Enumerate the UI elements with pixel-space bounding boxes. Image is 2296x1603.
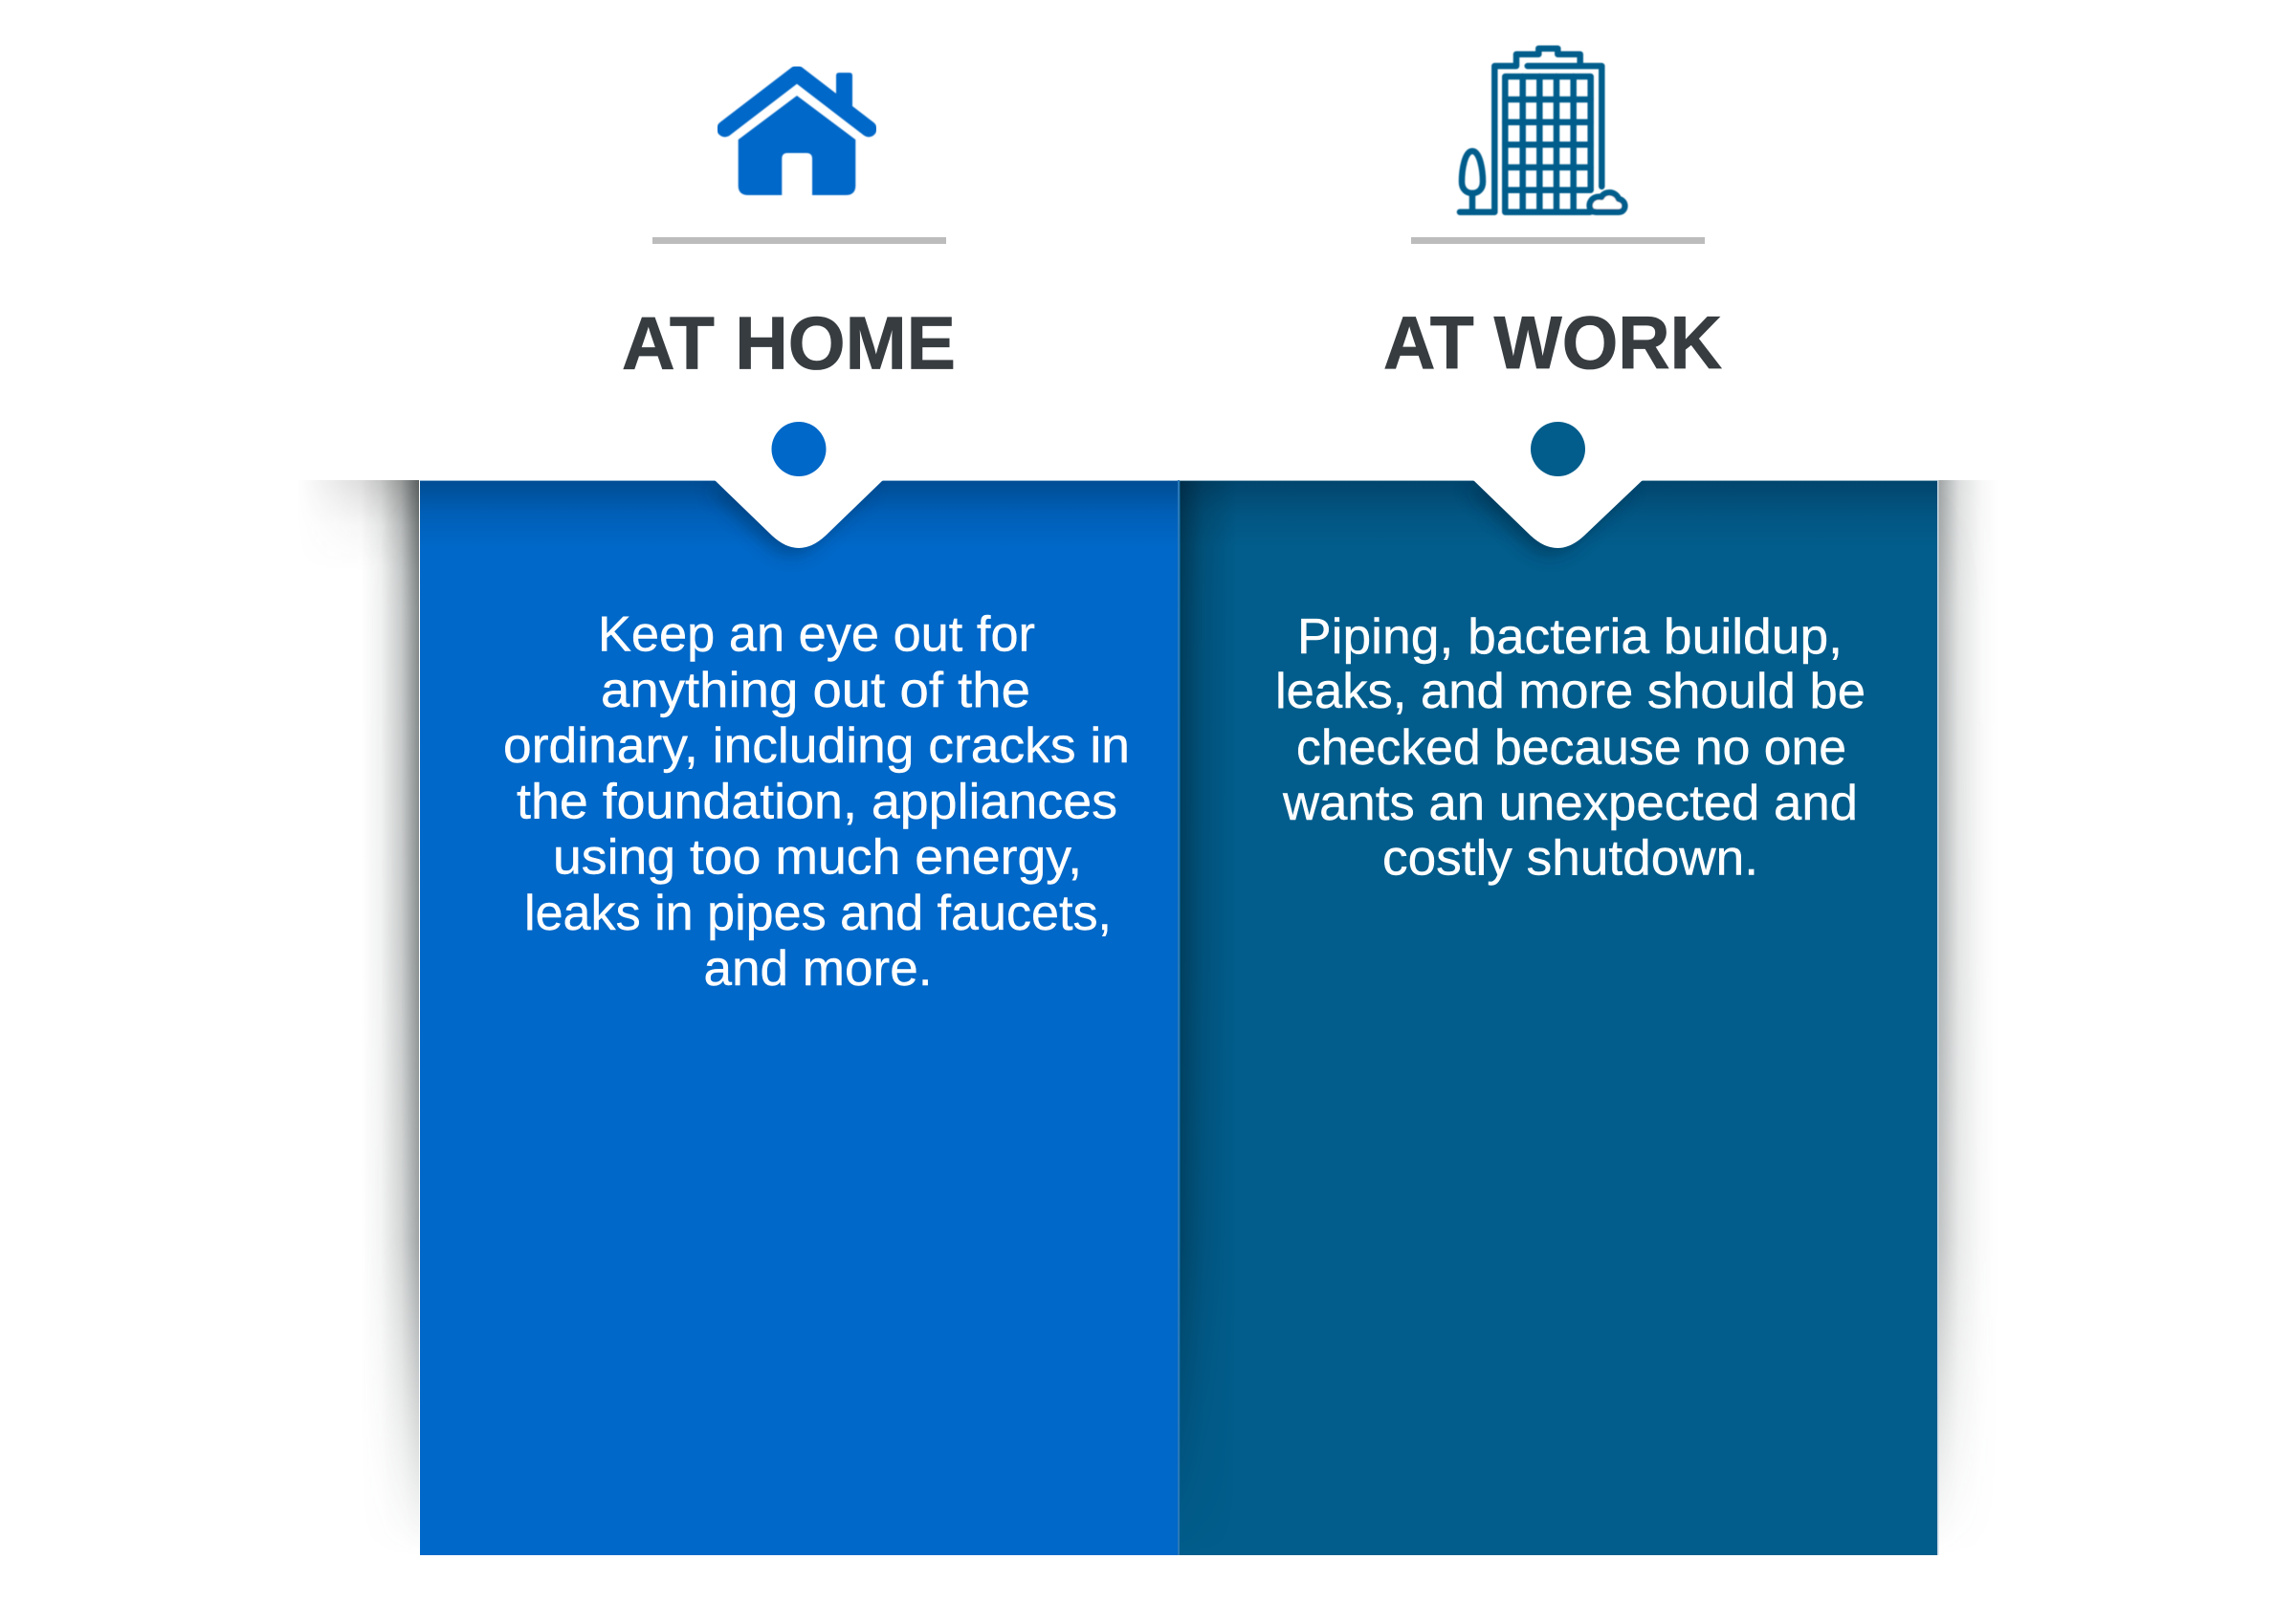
text block: at home: and more. (704, 941, 932, 997)
panel: at home (420, 480, 1180, 1555)
text block: at home: the foundation, appliances (517, 775, 1117, 830)
notch: at home (714, 479, 884, 548)
icon: office building (1460, 49, 1624, 212)
heading: at work: AT WORK (1383, 300, 1722, 384)
text block: at work (1275, 609, 1866, 886)
text block: at home: leaks in pipes and faucets, (524, 886, 1112, 941)
marker dot: at work (1531, 422, 1585, 476)
text block: at work: checked because no one (1296, 720, 1846, 776)
text block: at work: leaks, and more should be (1275, 664, 1866, 719)
icon: house (725, 73, 869, 195)
notch: at work (1472, 479, 1644, 548)
heading: at home: AT HOME (622, 300, 956, 384)
text block: at home: using too much energy, (553, 830, 1082, 886)
paper-curl shadow: left (313, 480, 419, 1526)
text block: at work: wants an unexpected and (1282, 776, 1858, 831)
text block: at home (503, 606, 1130, 997)
marker dot: at home (771, 422, 827, 476)
paper-curl shadow: right (1938, 480, 1982, 1513)
text block: at work: Piping, bacteria buildup, (1297, 609, 1843, 665)
panel: at work (1180, 480, 1938, 1555)
text block: at home: Keep an eye out for (598, 606, 1035, 662)
divider: at home (652, 237, 946, 244)
divider: at work (1411, 237, 1705, 244)
text block: at home: anything out of the (601, 663, 1030, 718)
text block: at home: ordinary, including cracks in (503, 718, 1130, 774)
text block: at work: costly shutdown. (1382, 830, 1758, 886)
